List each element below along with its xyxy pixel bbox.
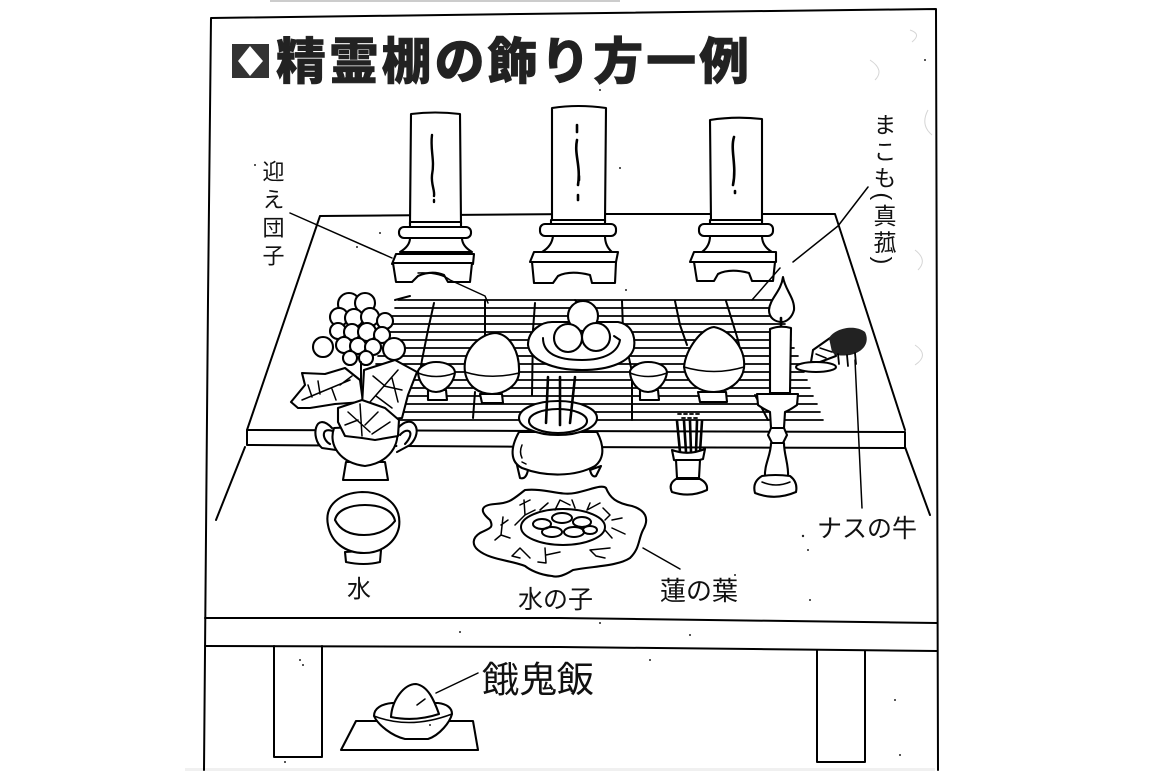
flower cluster <box>313 293 405 365</box>
bowl: rice right <box>684 327 744 402</box>
label: water: 水 <box>347 576 371 603</box>
eggplant cow <box>796 328 867 508</box>
label: mizu-no-ko: 水の子 <box>518 586 593 614</box>
mukae-dango on a dish <box>528 301 634 370</box>
water bowl <box>327 492 399 564</box>
candle and candlestick <box>754 277 798 497</box>
leader line to gaki-meshi label <box>436 673 478 693</box>
label: gaki-meshi: 餓鬼飯 <box>482 659 594 700</box>
faint show-through marks <box>870 30 932 365</box>
shelf outline <box>216 214 930 520</box>
scan specks <box>254 44 926 763</box>
title text: 精霊棚の飾り方一例 <box>276 34 749 90</box>
gaki-meshi offering <box>341 673 478 750</box>
page frame <box>204 9 938 770</box>
memorial tablet: left <box>392 112 474 282</box>
small cup left <box>418 362 455 400</box>
title <box>232 34 749 90</box>
small cup right <box>630 362 667 400</box>
lower table board and legs <box>205 618 937 762</box>
memorial tablet: center <box>530 106 618 283</box>
lotus leaf with mizu-no-ko <box>474 487 680 577</box>
label: mukae-dango: 迎え団子 <box>260 160 284 272</box>
label: makomo: まこも(真菰) <box>870 113 896 268</box>
bowl: rice left <box>465 333 519 403</box>
label: lotus leaf: 蓮の葉 <box>660 576 738 606</box>
leader lines to mukae-dango and makomo <box>290 187 868 303</box>
lotus-style leaves <box>291 368 363 408</box>
icon: title diamond <box>232 44 269 78</box>
flower vase <box>291 293 417 480</box>
incense burner <box>513 377 602 478</box>
memorial tablet: right <box>690 118 776 281</box>
incense stick holder <box>671 414 707 495</box>
bamboo mat (makomo) <box>356 296 823 420</box>
label: eggplant cow: ナスの牛 <box>817 515 917 543</box>
